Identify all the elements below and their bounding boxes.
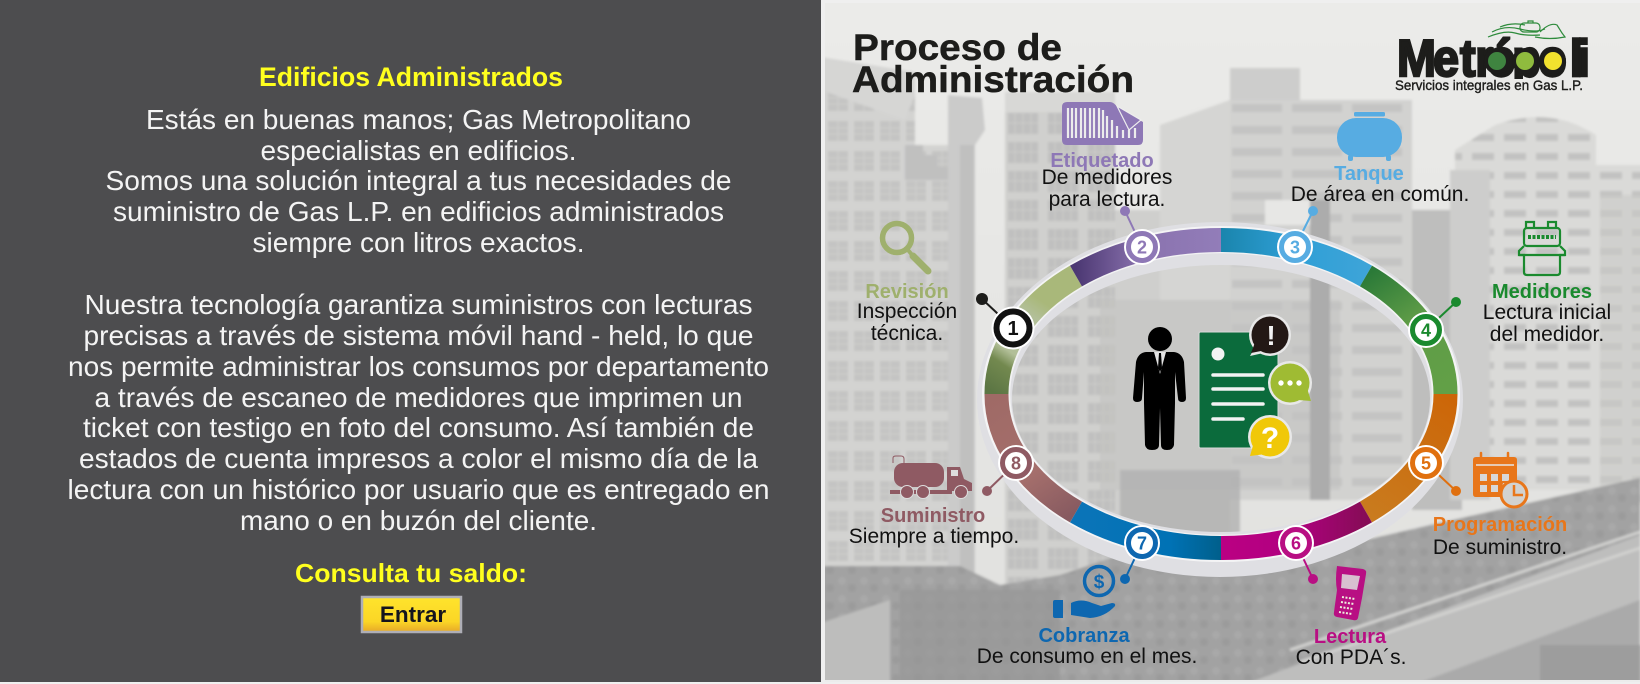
icon: gas meter: [1519, 222, 1565, 275]
text block: introduction: Somos una solución integral a tus necesidades de: [106, 165, 732, 196]
badge 8 with pin: 8: [1011, 454, 1021, 474]
step: Programación: De suministro.: [1433, 536, 1567, 559]
step: Suministro: [849, 456, 1019, 548]
logo: Metrópoli: Metrópoli: [1397, 30, 1590, 88]
icon: barcode label: [1062, 102, 1143, 145]
step: Medidores: Lectura inicial: [1483, 301, 1611, 324]
text block: introduction: suministro de Gas L.P. en edificios administrados: [113, 196, 724, 227]
icon: person in suit: [1133, 327, 1186, 450]
text block: technology description: precisas a través de sistema móvil hand - held, lo que: [84, 320, 753, 351]
text block: introduction: Estás en buenas manos; Gas Metropolitano: [146, 104, 691, 135]
step: Tanque: De área en común.: [1291, 183, 1469, 206]
text block: technology description: [68, 289, 770, 536]
step: Lectura: [1296, 566, 1406, 669]
icon: hand with coin: [1053, 566, 1115, 618]
step: Tanque: Tanque: [1334, 163, 1404, 185]
panel: left information: [0, 0, 821, 682]
badge 4 with pin: 4: [1421, 320, 1431, 340]
step: Etiquetado: Etiquetado: [1050, 150, 1154, 172]
text block: technology description: a través de escaneo de medidores que imprimen un: [94, 382, 742, 413]
button: Entrar: [362, 597, 461, 632]
step: Medidores: [1483, 222, 1611, 346]
bubble: ellipsis: [1268, 361, 1312, 405]
badge 5 with pin: 5: [1421, 454, 1431, 474]
step: Tanque: [1291, 112, 1469, 206]
icon: calendar and clock: [1473, 453, 1527, 507]
badge 3 with pin: [1277, 206, 1318, 265]
bubble: question: [1248, 415, 1292, 459]
text block: introduction: [106, 104, 732, 258]
step: Etiquetado: para lectura.: [1049, 188, 1165, 211]
step: Medidores: del medidor.: [1490, 323, 1604, 346]
bubble: question: ?: [1261, 422, 1279, 455]
heading: Edificios Administrados: Edificios Administrados: [259, 62, 563, 92]
icon: green document with speech bubbles: [1199, 314, 1312, 459]
icon: tanker truck: [890, 456, 972, 498]
bubble: exclamation: !: [1266, 320, 1276, 351]
step: Lectura: Lectura: [1314, 626, 1387, 648]
text block: introduction: especialistas en edificios.: [260, 135, 576, 166]
icon: gas tank: [1337, 112, 1402, 161]
badge 7 with pin: [1120, 525, 1160, 584]
logo: Metrópoli: Servicios integrales en Gas L.P.: [1395, 77, 1583, 93]
button: Entrar: Entrar: [380, 602, 446, 627]
step: Suministro: Suministro: [881, 505, 985, 527]
step: Cobranza: De consumo en el mes.: [977, 645, 1197, 668]
step: Etiquetado: [1042, 102, 1172, 211]
icon: handheld PDA: [1334, 566, 1366, 620]
icon: hand with coin: $: [1094, 572, 1105, 593]
badge 5 with pin: [1408, 445, 1461, 496]
badge 6 with pin: [1278, 525, 1318, 584]
heading: Consulta tu saldo: Consulta tu saldo:: [295, 558, 527, 588]
badge 8 with pin: [982, 445, 1034, 496]
badge 3 with pin: 3: [1290, 238, 1300, 258]
step: Medidores: Medidores: [1492, 281, 1592, 303]
step: Revisión: técnica.: [871, 322, 943, 345]
title: Proceso de Administración: Proceso de: [853, 27, 1062, 68]
background: grayscale city photograph: [815, 0, 1640, 684]
text block: technology description: nos permite administrar los consumos por departamento: [68, 351, 769, 382]
text block: technology description: estados de cuenta impresos a color el mismo día de la: [79, 443, 758, 474]
step: Revisión: Inspección: [857, 300, 957, 323]
step: Etiquetado: De medidores: [1042, 166, 1172, 189]
step: Revisión: [857, 224, 957, 345]
badge 2 with pin: 2: [1137, 238, 1147, 258]
step: Revisión: Revisión: [865, 281, 949, 303]
text block: technology description: mano o en buzón del cliente.: [240, 505, 597, 536]
badge 6 with pin: 6: [1291, 534, 1301, 554]
step: Cobranza: Cobranza: [1038, 625, 1130, 647]
step: Cobranza: [977, 566, 1197, 668]
title: Proceso de Administración: Administración: [852, 59, 1134, 100]
text block: technology description: Nuestra tecnología garantiza suministros con lecturas: [84, 289, 752, 320]
text block: technology description: ticket con testigo en foto del consumo. Así también de: [83, 412, 754, 443]
text block: technology description: lectura con un histórico por usuario que es entregado en: [68, 474, 770, 505]
step: Programación: Programación: [1433, 514, 1567, 536]
text block: introduction: siempre con litros exactos.: [252, 227, 584, 258]
title: Proceso de Administración: [852, 27, 1134, 100]
chart: process ring: [977, 222, 1463, 577]
badge 1 with pin: 1: [1007, 318, 1019, 340]
icon: magnifying glass: [882, 224, 928, 271]
badge 1 with pin: [976, 293, 1034, 350]
step: Suministro: Siempre a tiempo.: [849, 525, 1019, 548]
step: Programación: [1433, 453, 1567, 559]
badge 2 with pin: [1120, 206, 1160, 265]
step: Lectura: Con PDA´s.: [1296, 646, 1406, 669]
badge 7 with pin: 7: [1137, 534, 1147, 554]
panel: right process infographic: [815, 0, 1640, 684]
bubble: exclamation: [1249, 314, 1291, 356]
badge 4 with pin: [1408, 297, 1461, 348]
